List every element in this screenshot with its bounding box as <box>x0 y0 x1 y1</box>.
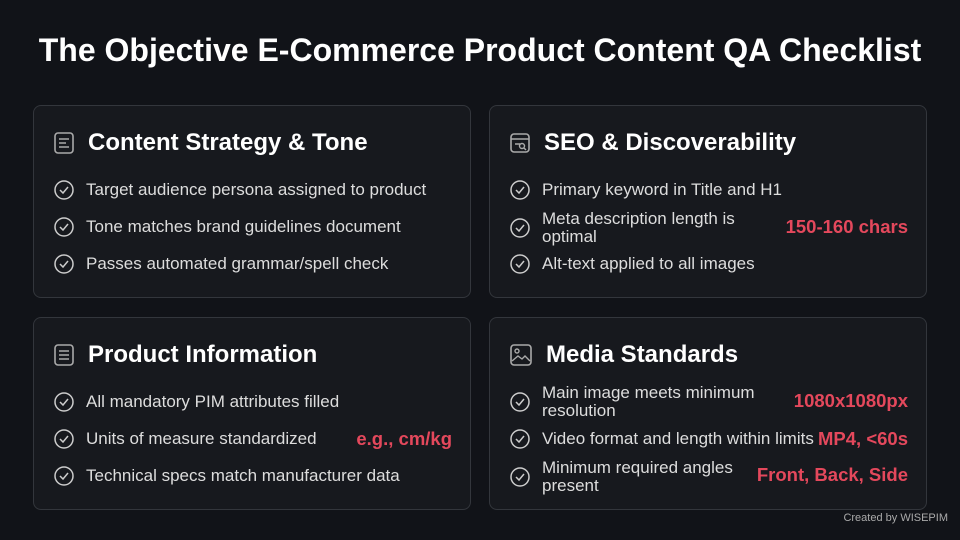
item: All mandatory PIM attributes filled <box>86 392 339 411</box>
item: Alt-text applied to all images <box>542 254 755 273</box>
item: Minimum required angles <box>542 458 733 477</box>
item <box>510 383 755 420</box>
heading: Media Standards <box>546 341 738 368</box>
value: Front, Back, Side <box>757 464 908 485</box>
item <box>510 458 733 495</box>
item: present <box>542 476 599 495</box>
item: resolution <box>542 401 616 420</box>
heading: Content Strategy & Tone <box>88 129 368 156</box>
heading: Product Information <box>88 341 317 368</box>
item: Units of measure standardized <box>86 429 317 448</box>
item: Target audience persona assigned to product <box>86 180 426 199</box>
panel: SEO <box>489 105 927 298</box>
panel: content strategy <box>33 105 471 298</box>
value: 1080x1080px <box>794 390 908 411</box>
item: Primary keyword in Title and H1 <box>542 180 782 199</box>
value: e.g., cm/kg <box>356 428 452 449</box>
item <box>510 209 735 246</box>
item: Main image meets minimum <box>542 383 755 402</box>
panel: media standards <box>489 317 927 510</box>
item: Tone matches brand guidelines document <box>86 217 401 236</box>
panel: product information <box>33 317 471 510</box>
item: Technical specs match manufacturer data <box>86 466 400 485</box>
item: Passes automated grammar/spell check <box>86 254 388 273</box>
item: Meta description length is <box>542 209 735 228</box>
value: 150-160 chars <box>786 216 908 237</box>
heading: SEO & Discoverability <box>544 129 796 156</box>
item: Video format and length within limits <box>542 429 814 448</box>
title: The Objective E-Commerce Product Content QA Checklist <box>39 32 921 68</box>
credit: Created by WISEPIM <box>843 512 948 524</box>
item: optimal <box>542 227 597 246</box>
value: MP4, <60s <box>818 428 908 449</box>
